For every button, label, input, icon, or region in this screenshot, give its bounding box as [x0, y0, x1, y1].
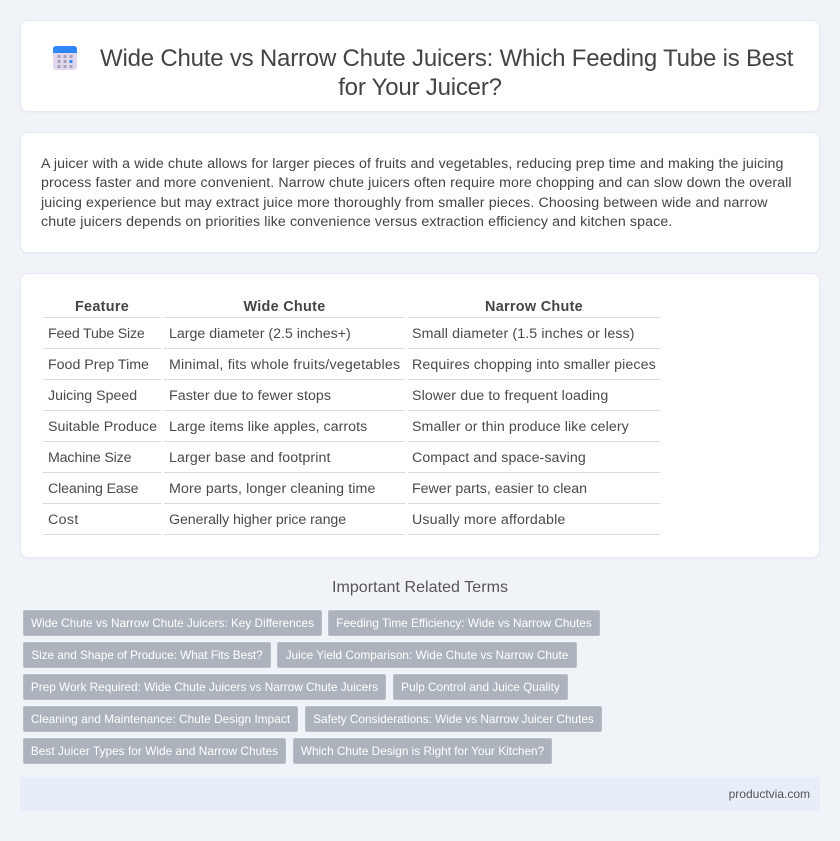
tag: Best Juicer Types for Wide and Narrow Chutes: [31, 744, 278, 758]
intro paragraph: A juicer with a wide chute allows for larger pieces of fruits and vegetables, reducing prep time and making the juicing: [41, 156, 784, 172]
tag: Safety Considerations: Wide vs Narrow Juicer Chutes: [313, 712, 594, 726]
intro paragraph: process faster and more convenient. Narrow chute juicers often require more chopping and can slow down the overall: [41, 175, 792, 191]
tag: [23, 738, 286, 764]
row: Juicing Speed: Faster due to fewer stops: [169, 388, 331, 404]
title: [100, 45, 794, 101]
tag: [305, 706, 602, 732]
tag: [23, 642, 271, 668]
heading: Important Related Terms: Important Related Terms: [332, 579, 508, 596]
tag: Which Chute Design is Right for Your Kitchen?: [301, 744, 544, 758]
row: Food Prep Time: Requires chopping into smaller pieces: [412, 357, 656, 373]
row: Cost: Generally higher price range: [169, 512, 346, 528]
panel: title card: [20, 20, 820, 112]
row: Suitable Produce: Suitable Produce: [48, 419, 157, 435]
footer bar: [20, 777, 820, 811]
row: Feed Tube Size: Large diameter (2.5 inches+): [169, 326, 351, 342]
row: Cleaning Ease: More parts, longer cleaning time: [169, 481, 376, 497]
row: Machine Size: Machine Size: [48, 450, 131, 466]
tag: Prep Work Required: Wide Chute Juicers vs Narrow Chute Juicers: [31, 680, 378, 694]
row: Suitable Produce: [48, 419, 629, 435]
tag: Size and Shape of Produce: What Fits Best?: [31, 648, 263, 662]
tag: [23, 674, 386, 700]
title: for Your Juicer?: [338, 74, 502, 101]
tag: [393, 674, 568, 700]
intro paragraph: chute juicers depends on priorities like convenience versus extraction efficiency and kitchen space.: [41, 214, 672, 230]
row: Food Prep Time: Food Prep Time: [48, 357, 149, 373]
row: Food Prep Time: Minimal, fits whole fruits/vegetables: [169, 357, 400, 373]
row: Machine Size: Compact and space-saving: [412, 450, 586, 466]
intro paragraph: juicing experience but may extract juice more thoroughly from smaller pieces. Choosing between wide and narrow: [41, 195, 768, 211]
row: Feed Tube Size: [48, 326, 635, 342]
row: Cost: Usually more affordable: [412, 512, 565, 528]
header: Narrow Chute: Narrow Chute: [485, 299, 583, 315]
row: Cleaning Ease: Cleaning Ease: [48, 481, 138, 497]
header: Wide Chute: Wide Chute: [243, 299, 326, 315]
comparison table: [43, 299, 660, 535]
tag: [277, 642, 577, 668]
row: Juicing Speed: Juicing Speed: [48, 388, 137, 404]
row: Feed Tube Size: Feed Tube Size: [48, 326, 145, 342]
tag: [328, 610, 600, 636]
title: Wide Chute vs Narrow Chute Juicers: Which Feeding Tube is Best: [100, 45, 793, 72]
tag: Cleaning and Maintenance: Chute Design Impact: [31, 712, 290, 726]
row: Juicing Speed: Slower due to frequent loading: [412, 388, 608, 404]
tag: Feeding Time Efficiency: Wide vs Narrow Chutes: [336, 616, 592, 630]
tag: [23, 706, 298, 732]
tag: [23, 610, 322, 636]
intro paragraph: [40, 156, 792, 230]
row: Cost: [48, 512, 565, 528]
header: Feature: Feature: [75, 299, 129, 315]
tag: Juice Yield Comparison: Wide Chute vs Narrow Chute: [286, 648, 568, 662]
row: Juicing Speed: [48, 388, 608, 404]
row: Cleaning Ease: Fewer parts, easier to clean: [412, 481, 587, 497]
row: Machine Size: [48, 450, 586, 466]
tag: Pulp Control and Juice Quality: [401, 680, 560, 694]
panel: intro text card: [20, 132, 820, 253]
footer source text: productvia.com: [729, 787, 810, 801]
row: Cleaning Ease: [48, 481, 587, 497]
row: Machine Size: Larger base and footprint: [169, 450, 331, 466]
row: Food Prep Time: [48, 357, 656, 373]
row: Cost: Cost: [48, 512, 79, 528]
row: Suitable Produce: Large items like apples, carrots: [169, 419, 367, 435]
icon: calendar: [53, 46, 77, 70]
panel: comparison table card: [20, 273, 820, 558]
tag: [293, 738, 552, 764]
row: Feed Tube Size: Small diameter (1.5 inches or less): [412, 326, 635, 342]
related terms tags: [23, 610, 602, 764]
row: Suitable Produce: Smaller or thin produce like celery: [412, 419, 629, 435]
tag: Wide Chute vs Narrow Chute Juicers: Key Differences: [31, 616, 314, 630]
